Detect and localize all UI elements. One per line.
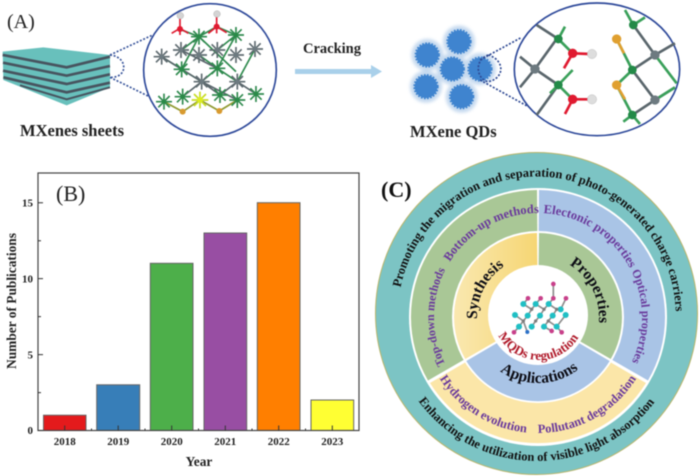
y axis title: Number of Publications — [4, 233, 19, 369]
outer ring text: bottom: Enhancing the utilization of visible light absorption — [418, 396, 655, 462]
outer teal ring — [376, 152, 698, 474]
axis tick marks — [38, 203, 332, 430]
white separator disc — [409, 188, 667, 446]
text: Optical properties: Optical properties — [632, 269, 650, 364]
white separator for middle ring — [452, 231, 624, 403]
x axis tick labels: 2018 — [54, 436, 76, 448]
second ring sector: properties — [538, 190, 665, 380]
text: Hydrogen evolution: Hydrogen evolution — [439, 374, 527, 434]
y axis tick labels: 15 — [22, 198, 34, 210]
bars by year — [44, 203, 354, 430]
icon: atomic lattice inset circle — [144, 4, 276, 136]
x axis tick labels: 2021 — [214, 436, 236, 448]
white centre disc — [488, 265, 588, 365]
chart axes frame — [38, 173, 359, 430]
y axis tick labels: 5 — [28, 350, 34, 362]
arrow: cracking — [295, 65, 382, 78]
label: MXenes sheets: MXenes sheets — [20, 121, 125, 140]
label: Cracking: Cracking — [303, 41, 362, 57]
dotted zoom lines from sheets — [110, 35, 153, 97]
label: Applications: Applications — [500, 364, 578, 385]
label: Properties: Properties — [569, 256, 610, 324]
outer ring text: top: Promoting the migration and separation of photo-generated charge carriers — [392, 168, 684, 312]
middle sector: Properties — [538, 233, 622, 359]
text: Bottom-up methods: Bottom-up methods — [442, 204, 540, 262]
x axis tick labels: 2020 — [161, 436, 183, 448]
y axis tick labels — [22, 198, 34, 437]
label: MQDs regulation: MQDs regulation — [498, 330, 579, 364]
text: Electonic properties: Electonic properties — [543, 204, 635, 268]
label: MXene QDs: MXene QDs — [410, 122, 497, 141]
panel label B: (B) — [56, 181, 85, 206]
middle sector: Synthesis — [454, 233, 538, 359]
panel label A: (A) — [7, 11, 35, 33]
x axis tick labels: 2022 — [268, 436, 290, 448]
panel label C: (C) — [381, 177, 412, 202]
label: Synthesis: Synthesis — [466, 260, 504, 319]
text: Top-down methods: Top-down methods — [427, 268, 446, 368]
icon: stacked MXene sheets — [3, 47, 110, 105]
panel B: publications bar chart — [4, 173, 359, 469]
text: Pollutant degradation: Pollutant degradation — [537, 376, 637, 434]
x axis tick labels: 2019 — [107, 436, 130, 448]
x axis tick labels: 2023 — [321, 436, 344, 448]
second ring sector: applications — [430, 320, 646, 443]
x axis tick labels — [54, 436, 344, 448]
y axis tick labels: 10 — [22, 274, 34, 286]
second ring sector: synthesis methods — [411, 190, 538, 380]
panel C: MQDs regulation circular diagram — [374, 151, 699, 476]
icon: QD atomic structure inset ellipse — [514, 3, 680, 136]
x axis title: Year — [186, 454, 212, 469]
icon: MQD molecule — [512, 282, 569, 335]
y axis tick labels: 0 — [28, 425, 34, 437]
panel A: MXene cracking schematic — [3, 3, 680, 141]
middle sector: Applications — [466, 319, 610, 401]
icon: MXene quantum dots cluster — [410, 26, 528, 113]
